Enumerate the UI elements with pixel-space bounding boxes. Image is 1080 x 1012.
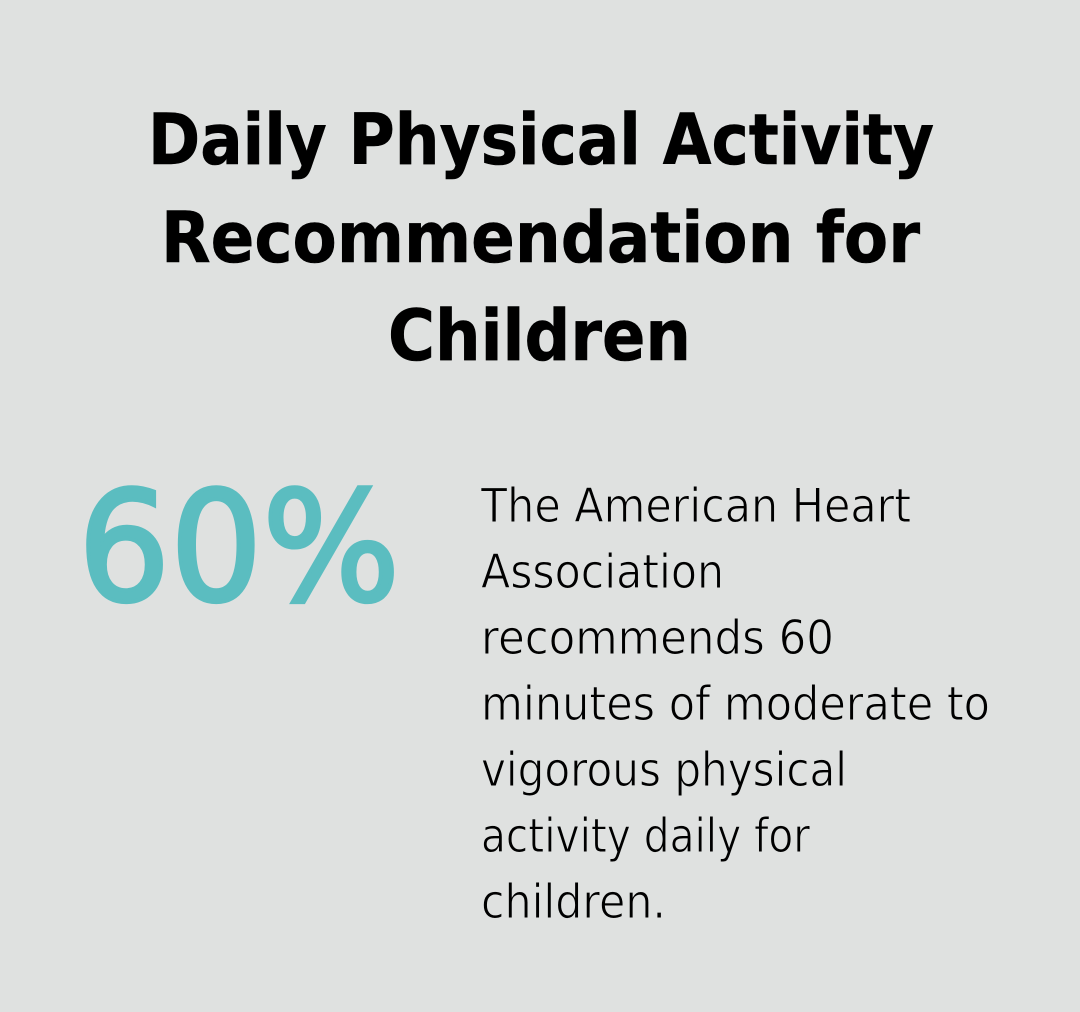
title [148,99,934,377]
description text block: recommends 60 [481,611,834,666]
description text block [480,479,990,930]
description text block: activity daily for [481,809,810,864]
description text block: minutes of moderate to [481,677,990,732]
title: Daily Physical Activity [148,99,934,181]
description text block: Association [481,545,724,600]
description text block: The American Heart [480,479,911,534]
description text block: vigorous physical [481,743,847,798]
big statistic: 60%: 60% [78,459,400,636]
description text block: children. [481,875,666,930]
title: Recommendation for [161,197,920,279]
title: Children [388,295,691,377]
